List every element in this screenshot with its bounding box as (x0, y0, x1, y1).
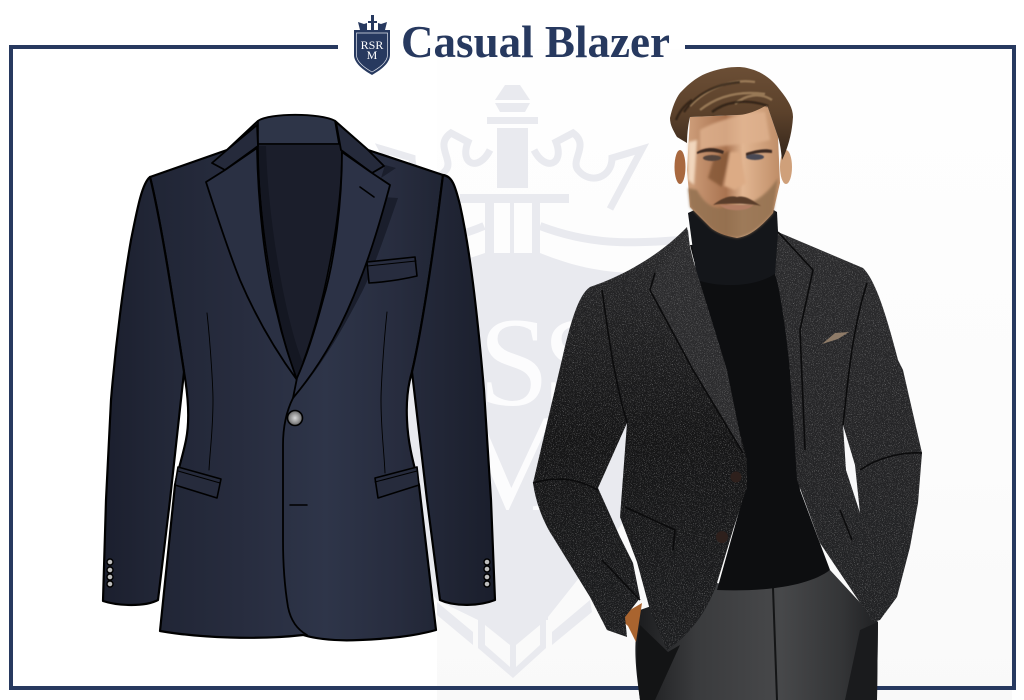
crest crown finial (487, 85, 538, 188)
cheek highlight (688, 140, 697, 185)
logo monogram (361, 38, 383, 62)
crest initials: S (479, 293, 549, 433)
watermark crest (360, 85, 680, 678)
title lockup (354, 15, 670, 75)
beard (688, 178, 778, 238)
crest shield (360, 253, 660, 620)
right sleeve (412, 175, 495, 605)
seams and darts (207, 312, 387, 473)
left cuff buttons (107, 559, 113, 587)
right lapel (293, 152, 390, 398)
right collar leaf (336, 122, 384, 173)
crest ribbon (455, 226, 680, 242)
right cuff buttons (484, 559, 490, 587)
nose shadow (708, 150, 730, 187)
nose bridge (724, 152, 746, 190)
left lapel (206, 148, 297, 380)
hair (670, 67, 793, 160)
blazer illustration (103, 115, 495, 640)
jacket left side (533, 227, 747, 650)
facial features (697, 148, 772, 210)
right hip pocket (375, 467, 419, 498)
eyebrows (697, 148, 772, 156)
brand crest logo (354, 15, 390, 75)
lower buttonhole (290, 504, 307, 506)
chest pocket (367, 257, 417, 283)
front edge (283, 398, 307, 635)
turtleneck body (690, 240, 830, 590)
moustache (713, 196, 761, 206)
title: Casual Blazer (401, 17, 670, 67)
model wearing casual blazer (533, 67, 922, 700)
facial shading (688, 112, 778, 238)
left lapel (650, 230, 747, 470)
lapel shadow (293, 165, 398, 398)
pocket square (822, 332, 849, 344)
hand in pocket (618, 603, 642, 642)
logo shield (354, 30, 390, 75)
left hip pocket (175, 467, 221, 498)
logo inner border (356, 33, 388, 72)
gap between arm and body (843, 425, 860, 513)
jacket buttons (716, 472, 742, 543)
inner lining (258, 144, 342, 378)
collar band (258, 115, 339, 144)
turtleneck collar (688, 205, 780, 285)
crest initials: S (543, 293, 613, 433)
left sleeve (103, 177, 184, 605)
forehead highlight (700, 112, 770, 150)
crest crown arms (382, 133, 642, 209)
crest initials: M (450, 386, 574, 541)
trousers (635, 570, 878, 700)
left collar leaf (212, 125, 258, 170)
lapel buttonhole (360, 187, 374, 197)
face (687, 105, 780, 238)
logo monogram: RSR (361, 38, 383, 52)
blazer body (150, 115, 443, 640)
eye sockets (703, 155, 721, 161)
front button (288, 410, 302, 426)
lining shadow (259, 146, 303, 378)
jacket folds (533, 232, 922, 600)
crest base chevron (437, 600, 592, 678)
photo background panel (437, 49, 1012, 700)
crest initials (450, 293, 613, 541)
head (670, 67, 793, 238)
logo crown (358, 15, 387, 30)
jacket right side (775, 232, 922, 622)
ears (674, 150, 686, 184)
logo monogram: M (367, 48, 378, 62)
crest crossbar and pillars (460, 194, 569, 253)
lips (720, 205, 753, 210)
hair strands (676, 81, 772, 120)
